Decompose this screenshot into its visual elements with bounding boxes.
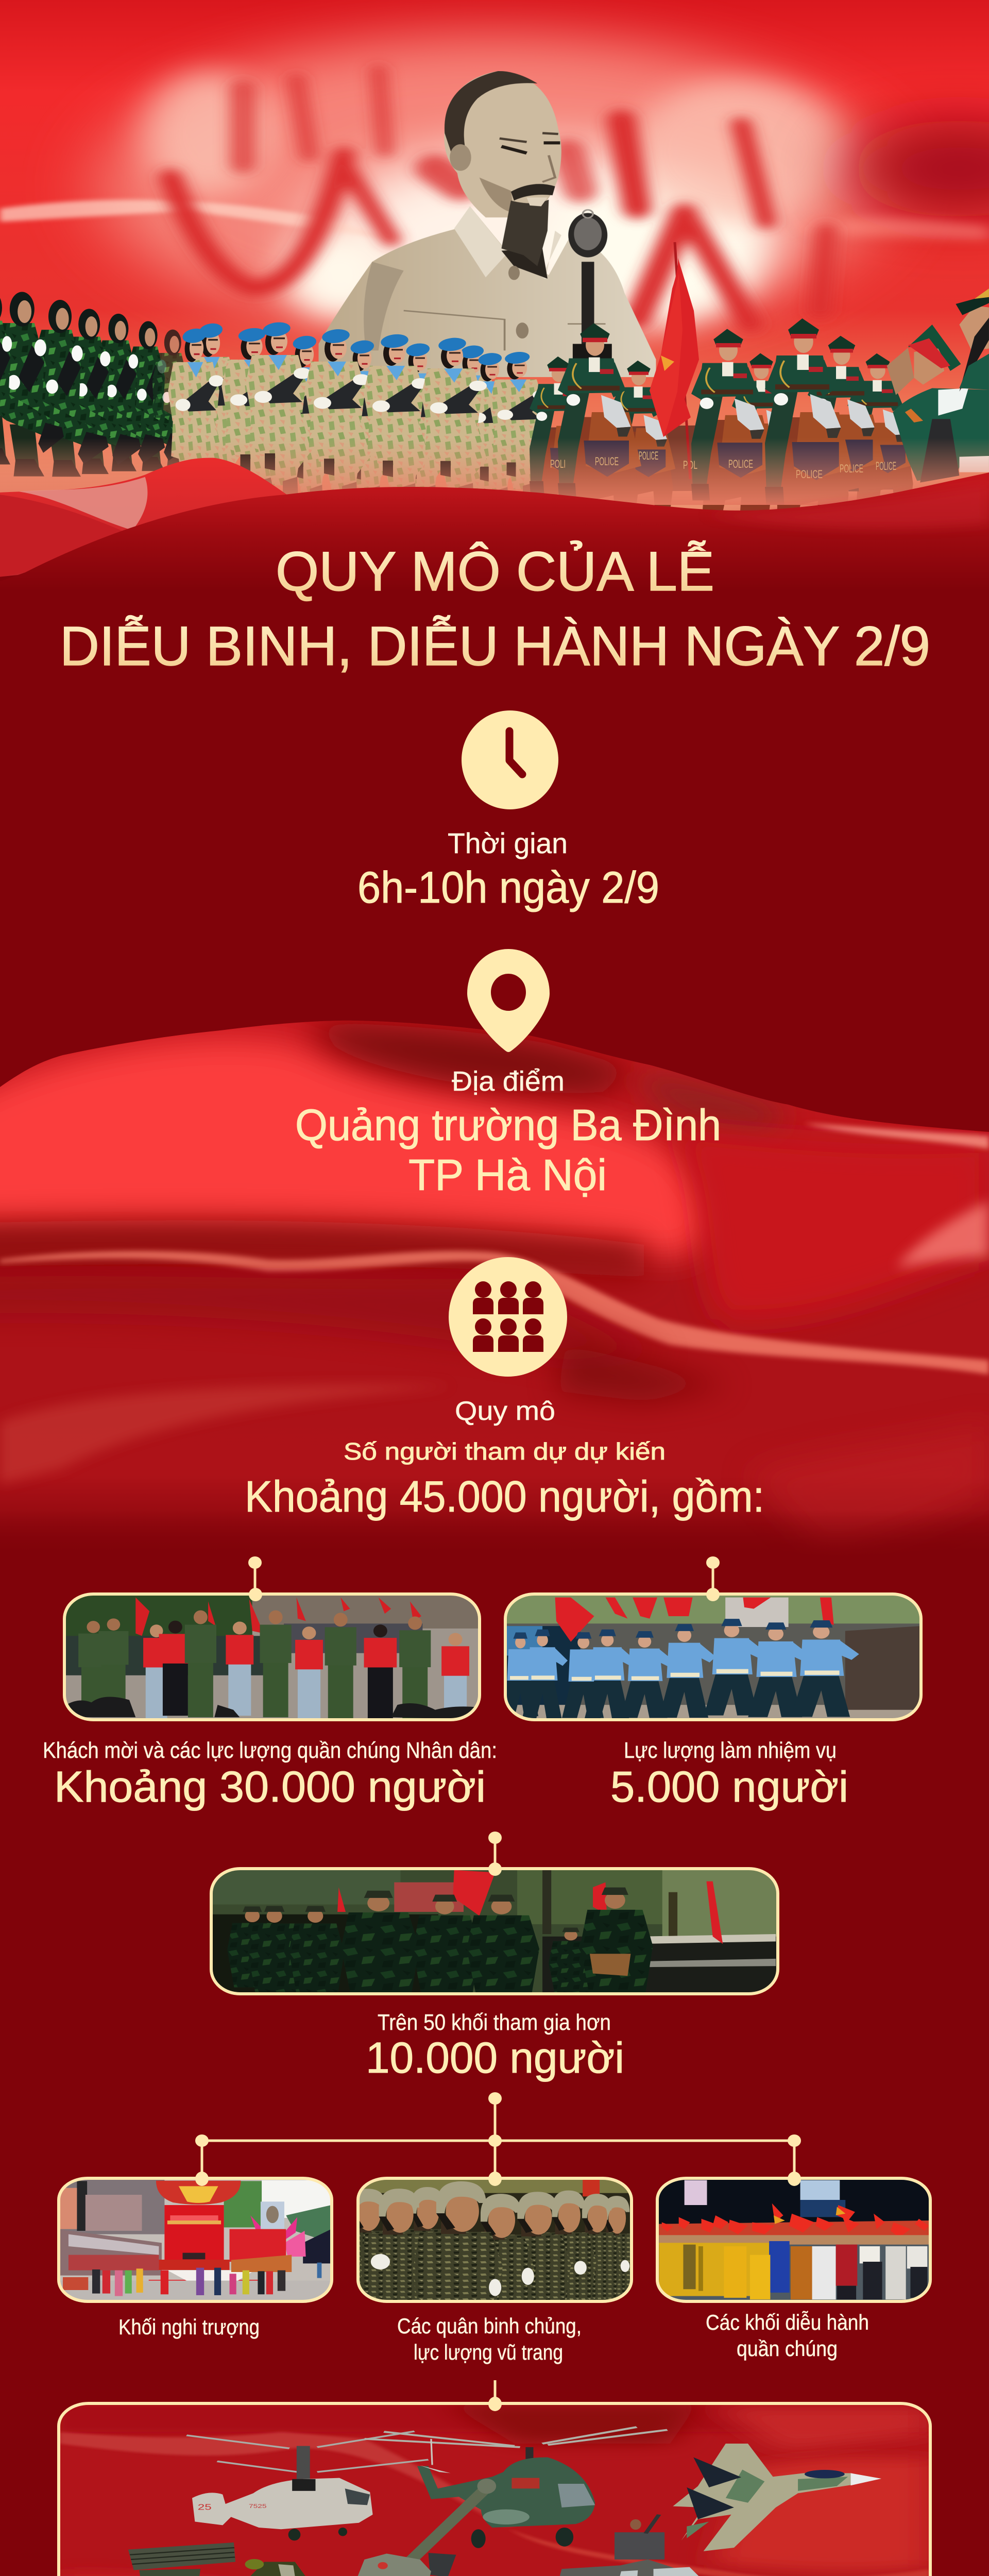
panel: military vehicles (59, 2397, 930, 2576)
portrait: President Ho Chi Minh at microphone (318, 71, 656, 377)
text: duty forces count: Lực lượng làm nhiệm vụ (624, 1738, 837, 1763)
icon: clock (462, 710, 558, 809)
mounted police riders (530, 318, 916, 551)
hero bottom red waves (0, 458, 989, 603)
text: guests count: Khách mời và các lực lượng quần chúng Nhân dân: (43, 1738, 497, 1763)
red national flag (650, 242, 699, 479)
text: civilian block: quần chúng (737, 2336, 838, 2361)
text: duty forces count: 5.000 người (610, 1762, 848, 1811)
text: parade blocks count: 10.000 người (366, 2033, 624, 2082)
helicopter: Ka-28: 25 (198, 2502, 212, 2512)
helicopter: Ka-28 (186, 2431, 429, 2540)
police labels: POLICE (639, 449, 658, 462)
text: civilian block: Các khối diễu hành (706, 2310, 869, 2334)
text: scale (245, 1396, 764, 1521)
panel satin background (59, 2403, 930, 2576)
title: DIỄU BINH, DIỄU HÀNH NGÀY 2/9 (60, 615, 930, 677)
connector: guests (248, 1556, 262, 1595)
police labels: POLICE (595, 455, 619, 468)
police labels: POLI (550, 457, 566, 470)
icon: location pin (467, 949, 550, 1052)
connector: duty forces (706, 1556, 720, 1595)
text: parade blocks count: Trên 50 khối tham gia hơn (378, 2010, 611, 2035)
photo: guests and public forces (63, 1588, 483, 1727)
armored police vehicle (553, 2515, 778, 2576)
text: scale: Quy mô (455, 1396, 555, 1426)
police labels: POL (683, 459, 697, 471)
fighter jet: Su-30 (673, 2444, 881, 2551)
text: guests count (43, 1738, 497, 1811)
police labels: POLICE (840, 462, 863, 475)
text: armed forces block: lực lượng vũ trang (414, 2340, 563, 2364)
text: time: Thời gian (448, 827, 568, 859)
text: armed forces block: Các quân binh chủng, (397, 2314, 582, 2338)
icon: crowd of people (449, 1257, 567, 1377)
connector: vehicles (493, 2380, 497, 2405)
police labels (550, 449, 896, 481)
mounted police riders: POLICE (876, 460, 896, 472)
self-propelled howitzer (334, 2479, 525, 2576)
text: armed forces block (397, 2314, 582, 2364)
title: QUY MÔ CỦA LỄ (276, 540, 714, 602)
text: guests count: Khoảng 30.000 người (54, 1762, 486, 1811)
connector: parade blocks (488, 1832, 502, 1869)
rocket launcher truck (128, 2543, 335, 2576)
text: ceremonial block: Khối nghi trượng (118, 2315, 260, 2339)
text: time (357, 827, 659, 912)
helicopter: Mi-8 (364, 2427, 668, 2548)
text: scale: Khoảng 45.000 người, gồm: (245, 1472, 764, 1521)
text: place: TP Hà Nội (408, 1151, 607, 1200)
text: place: Quảng trường Ba Đình (295, 1101, 721, 1150)
text: place: Địa điểm (452, 1066, 565, 1097)
blurred ghost figures in hero background (170, 71, 826, 324)
text: time: 6h-10h ngày 2/9 (357, 863, 659, 912)
hero banner background with glow (0, 0, 989, 515)
photo: armed forces helmets (333, 2172, 638, 2333)
fade at bottom of troops (0, 438, 989, 505)
police labels: POLICE (796, 468, 823, 481)
text: civilian block (706, 2310, 869, 2361)
connector tree to three blocks (195, 2092, 801, 2179)
foreground honor guards at right edge (887, 289, 989, 483)
marching peacekeepers, blue berets (168, 320, 548, 509)
photo: duty forces in blue (501, 1588, 924, 1722)
satin red cloth background (0, 1021, 989, 1561)
helicopter: Ka-28: 7525 (249, 2503, 267, 2510)
police labels: POLICE (728, 457, 753, 470)
photo: ceremonial float (57, 2172, 334, 2303)
text: scale: Số người tham dự dự kiến (344, 1438, 666, 1465)
text: parade blocks count (366, 2010, 624, 2082)
photo: marching soldiers (211, 1862, 779, 1997)
photo: civilian parade flags (656, 2172, 933, 2303)
text: place (295, 1066, 721, 1200)
marching infantry, green camouflage (0, 292, 234, 477)
title (60, 540, 930, 677)
text: duty forces count (610, 1738, 848, 1811)
